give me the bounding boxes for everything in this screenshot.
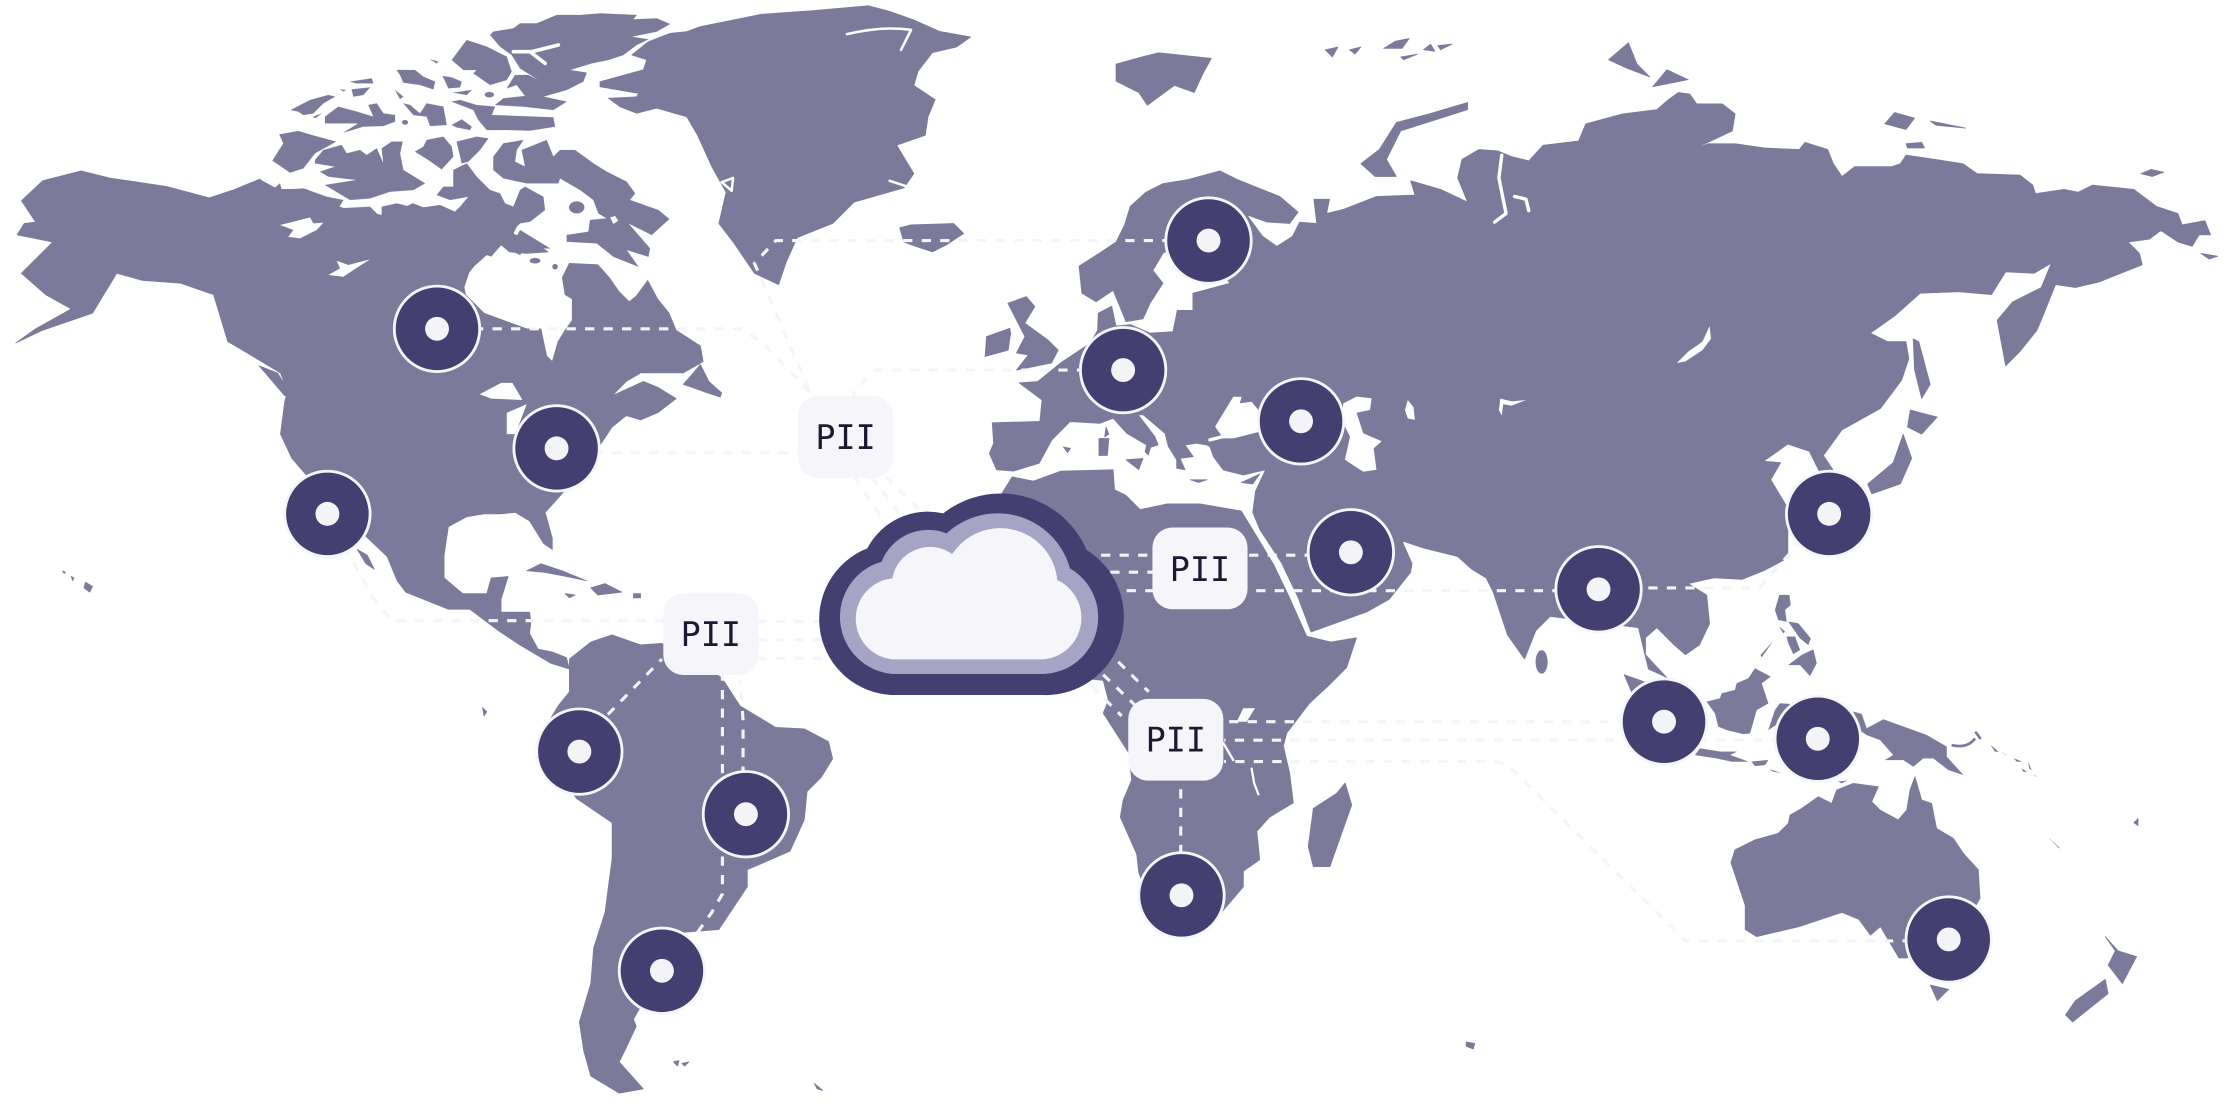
PII badge: South America: PII (681, 615, 741, 654)
marker: Brazil (703, 772, 789, 857)
route: Africa PII to cloud (1092, 662, 1149, 716)
fjords of Greenland (722, 28, 911, 191)
PII badge: Africa: PII (1146, 721, 1206, 760)
map: Eurasia (989, 93, 2211, 678)
map: Arctic islands of Eurasia (1116, 38, 2218, 259)
route: South America PII to cloud (757, 622, 833, 658)
Banks and Victoria islands (272, 131, 488, 200)
Queen Elizabeth and Parry islands (291, 59, 555, 133)
map: Japan and Sakhalin (1868, 339, 1937, 494)
route: Canada to North Atlantic PII (437, 329, 823, 406)
route: Southeast Asia to Africa PII (1224, 721, 1664, 723)
map: Tasmania and New Zealand (1930, 818, 2138, 1022)
marker: US East (514, 406, 599, 491)
northern mainland coast (260, 163, 545, 290)
map: Britain and Ireland (985, 297, 1058, 370)
PII badge: Middle East (1152, 528, 1248, 609)
route: North Atlantic PII to cloud (854, 477, 925, 530)
route: Peru to South America PII (608, 659, 662, 715)
map: Sumatra (1624, 675, 1673, 726)
route: East Asia to South Asia line (1599, 514, 1829, 588)
location markers (285, 198, 1991, 1013)
route: Brazil to South America PII (740, 680, 743, 776)
marker: Middle East (1308, 510, 1394, 595)
Baffin and Southampton islands (493, 140, 669, 267)
map: Mediterranean islands (1063, 427, 1260, 484)
route: Northern Europe to North Atlantic PII (754, 241, 1209, 401)
map: Iceland (900, 223, 964, 252)
map: Southeast Asian islands and New Guinea (1695, 595, 2060, 848)
map: Australia (1731, 777, 1980, 958)
route: South Asia to cloud PII (1096, 590, 1599, 592)
map: Sri Lanka (1536, 651, 1547, 673)
marker: Peru (537, 709, 622, 794)
map: Africa (939, 470, 1357, 932)
map: Caribbean islands (527, 564, 641, 598)
PII badge: North Atlantic (798, 396, 893, 478)
map: African lakes (1223, 708, 1258, 794)
route: Australia to Africa PII (1224, 762, 1949, 941)
route: cloud to Africa PII middle line (1110, 571, 1153, 573)
PII badge: North Atlantic: PII (815, 418, 876, 457)
Ellesmere Island (452, 13, 670, 110)
Ob river and Marmara channels (1210, 155, 1529, 440)
map: North America (16, 171, 722, 669)
marker: Eastern Europe (1258, 379, 1344, 464)
marker: Western Europe (1080, 327, 1166, 413)
route: Indonesia to Africa PII (1224, 739, 1818, 741)
inland seas and lakes of Eurasia (1215, 326, 1711, 472)
marker: US West (285, 471, 370, 557)
marker: East Asia (1786, 471, 1872, 557)
channels and lakes (513, 45, 558, 63)
map: South America (537, 635, 833, 1093)
route: US West to South America PII (327, 514, 669, 621)
PII badge: Middle East: PII (1170, 550, 1230, 589)
map: Pacific and Atlantic small islands (63, 571, 1475, 1090)
marker: Southeast Asia (1621, 679, 1707, 764)
route: Middle East to cloud PII (1082, 554, 1351, 556)
icon: central cloud (819, 493, 1124, 695)
route: Southern Africa to Africa PII (1180, 780, 1182, 854)
connection lines (327, 241, 1949, 941)
marker: Australia (1906, 897, 1991, 982)
map: Greenland (600, 6, 971, 285)
route: US East to North Atlantic PII (557, 452, 811, 454)
map: North American lakes (480, 383, 527, 434)
marker: Northern Europe (1166, 198, 1251, 283)
marker: Argentina (619, 928, 705, 1013)
marker: Canada (394, 286, 480, 372)
PII badge: Africa (1128, 699, 1223, 781)
route: Western Europe to North Atlantic PII (854, 370, 1123, 401)
marker: Southern Africa (1139, 853, 1224, 938)
map: Canadian Arctic islands (260, 13, 670, 290)
PII badge: South America (663, 593, 758, 675)
marker: Indonesia (1775, 696, 1860, 781)
marker: South Asia (1556, 547, 1641, 632)
map: Madagascar (1308, 783, 1352, 867)
route: Argentina to South America PII (698, 675, 722, 932)
